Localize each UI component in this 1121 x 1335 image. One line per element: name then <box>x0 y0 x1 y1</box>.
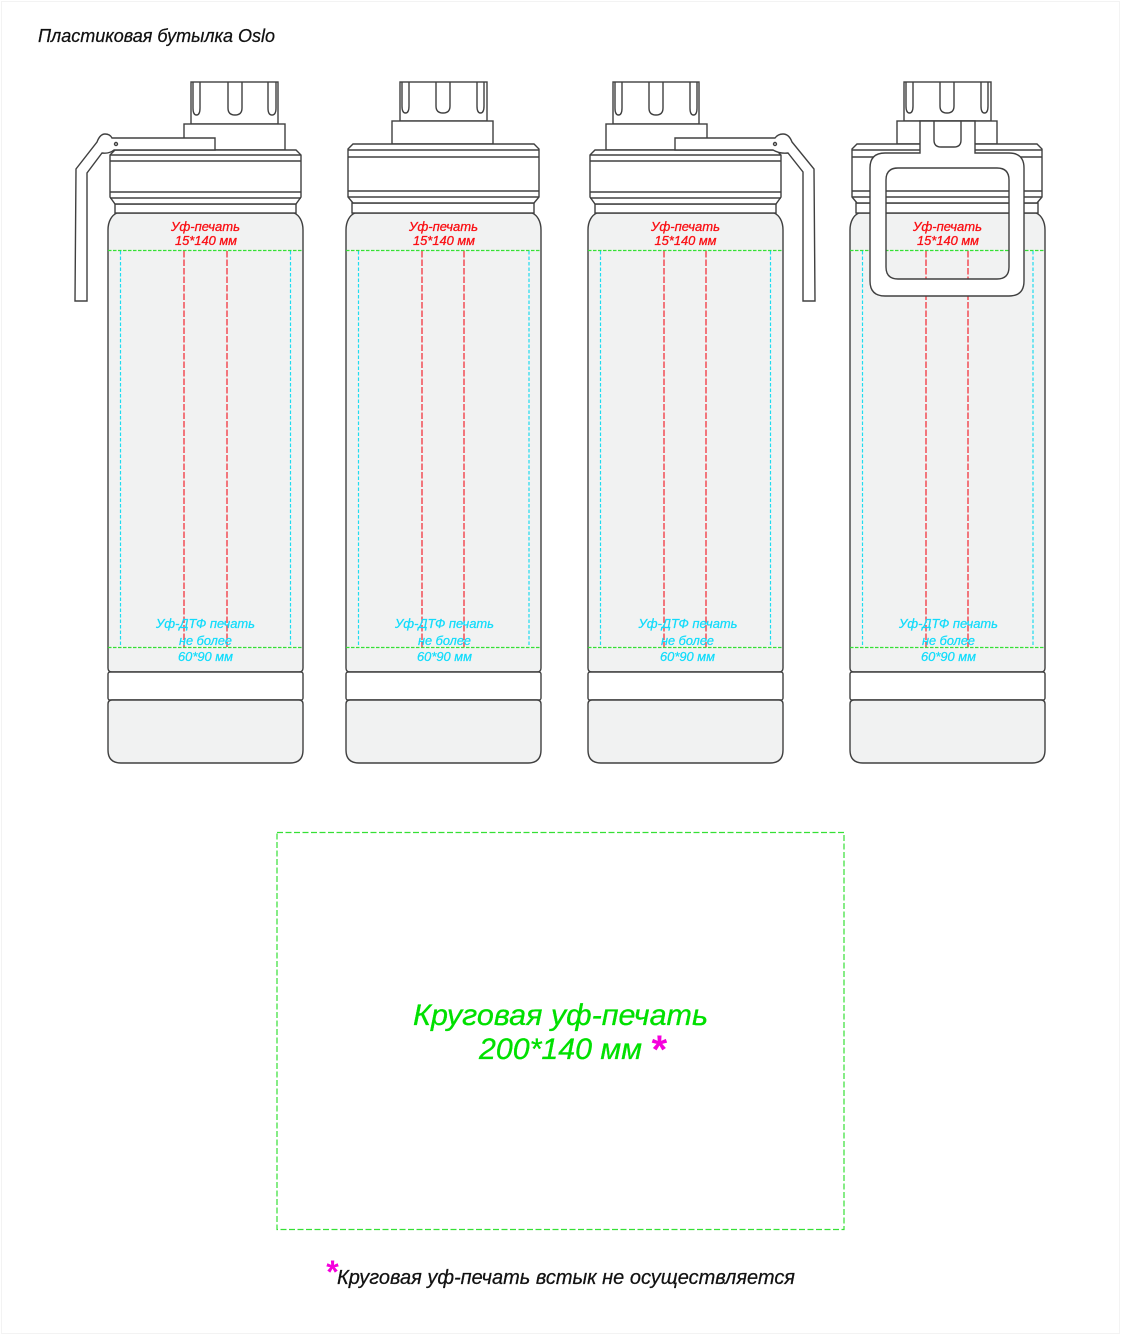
loop handle <box>870 121 1024 296</box>
collar <box>897 121 997 144</box>
UV print label <box>408 219 478 248</box>
bottle band <box>850 672 1045 700</box>
bottle band <box>346 672 541 700</box>
UV DTF print label <box>394 616 494 664</box>
footnote: Круговая уф-печать встык не осуществляется <box>337 1267 795 1289</box>
UV print label: 15*140 мм <box>654 233 717 248</box>
print zone guides <box>108 250 303 648</box>
UV DTF print label: не более <box>661 633 714 648</box>
UV DTF print label: не более <box>922 633 975 648</box>
UV DTF print label: Уф-ДТФ печать <box>898 616 998 631</box>
panel: wraparound print area <box>277 832 844 1230</box>
bottle body <box>850 213 1045 672</box>
neck <box>352 203 534 213</box>
UV DTF print label: 60*90 мм <box>178 649 233 664</box>
UV DTF print label: не более <box>418 633 471 648</box>
bottle band <box>588 672 783 700</box>
UV DTF print label: Уф-ДТФ печать <box>638 616 738 631</box>
collar <box>184 124 285 150</box>
bottle body <box>108 213 303 672</box>
wraparound print label <box>413 999 708 1066</box>
UV print label: Уф-печать <box>408 219 478 234</box>
bottle 2: no handle visible <box>346 82 541 763</box>
bottle 1: handle on left <box>75 82 303 763</box>
collar <box>606 124 707 150</box>
UV print label: 15*140 мм <box>917 233 979 248</box>
footnote: * <box>325 1254 339 1290</box>
UV print label <box>912 219 982 248</box>
bottle base <box>588 700 783 763</box>
side handle <box>75 134 215 301</box>
UV DTF print label: Уф-ДТФ печать <box>155 616 255 631</box>
collar <box>392 121 493 144</box>
UV print label: 15*140 мм <box>175 233 237 248</box>
side handle <box>675 134 815 301</box>
UV DTF print label: 60*90 мм <box>921 649 976 664</box>
UV print label <box>170 219 240 248</box>
UV print label: Уф-печать <box>170 219 240 234</box>
bottle base <box>108 700 303 763</box>
UV DTF print label: 60*90 мм <box>660 649 715 664</box>
lid <box>852 144 1042 203</box>
UV print label: 15*140 мм <box>413 233 475 248</box>
asterisk mark: * <box>650 1028 668 1072</box>
neck <box>856 203 1038 213</box>
UV print label: Уф-печать <box>650 219 720 234</box>
cap with slots <box>904 82 991 121</box>
UV DTF print label: 60*90 мм <box>417 649 472 664</box>
title: Пластиковая бутылка Oslo <box>38 26 275 46</box>
print zone guides <box>588 250 783 648</box>
UV DTF print label <box>638 616 738 664</box>
bottle body <box>588 213 783 672</box>
bottle body <box>346 213 541 672</box>
cap with slots <box>400 82 487 121</box>
bottle 3: handle on right <box>588 82 815 763</box>
bottle base <box>346 700 541 763</box>
UV DTF print label <box>898 616 998 664</box>
print zone guides <box>346 250 541 648</box>
UV DTF print label: Уф-ДТФ печать <box>394 616 494 631</box>
neck <box>115 204 296 213</box>
cap with slots <box>613 82 699 124</box>
lid <box>110 150 301 204</box>
UV print label <box>650 219 720 248</box>
lid <box>348 144 539 203</box>
cap with slots <box>191 82 278 124</box>
bottle base <box>850 700 1045 763</box>
bottle band <box>108 672 303 700</box>
lid <box>590 150 781 204</box>
UV print label: Уф-печать <box>912 219 982 234</box>
footnote <box>325 1254 795 1290</box>
wraparound print label: 200*140 мм <box>478 1033 642 1066</box>
bottle 4: front loop handle <box>850 82 1045 763</box>
neck <box>595 204 776 213</box>
wraparound print label: Круговая уф-печать <box>413 999 708 1032</box>
UV DTF print label: не более <box>179 633 232 648</box>
print zone guides <box>850 250 1045 648</box>
UV DTF print label <box>155 616 255 664</box>
